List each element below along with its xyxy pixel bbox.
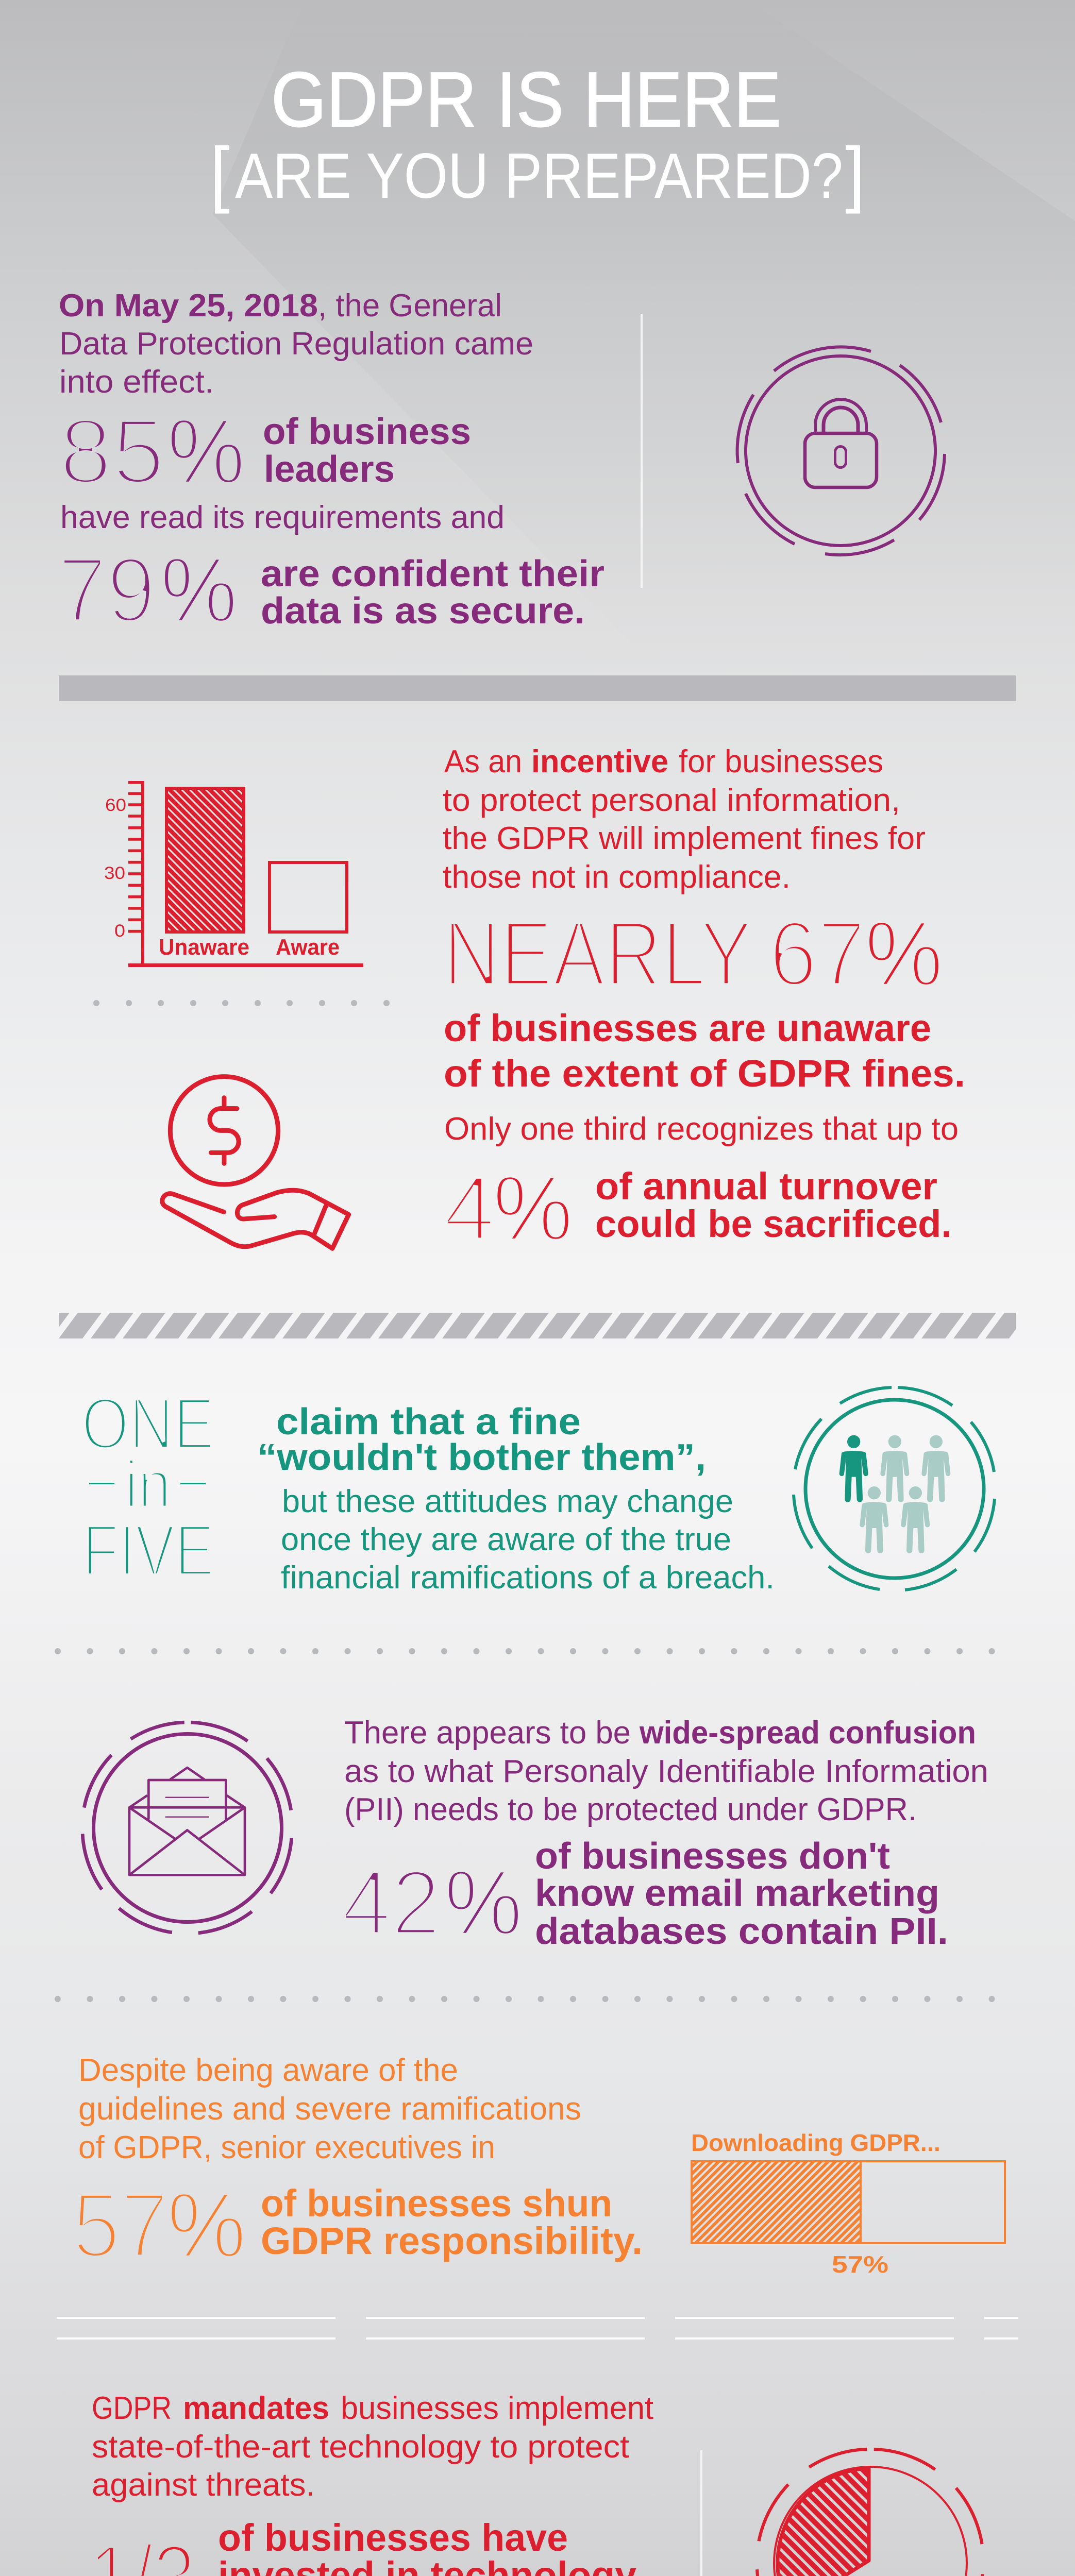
text: despite being aware: guidelines and severe ramifications [78,2091,581,2127]
stat: 85% [59,400,245,503]
stat: one in five: in [125,1447,171,1522]
stat label: of business leaders: of business [263,411,471,452]
text: attitudes may change [281,1484,775,1596]
stat: 42%: % [444,1851,523,1955]
divider: solid bar [59,675,1016,701]
stat label: shun responsibility: of businesses shun [261,2182,612,2225]
chart: download progress bar: 57% [832,2251,888,2278]
intro text: , the General [318,288,502,324]
text: despite being aware: of GDPR, senior executives in [78,2130,495,2165]
text: mandates: state-of-the-art technology to protect [92,2429,629,2465]
intro text: On May 25, 2018 [59,288,318,324]
text: mandates: mandates [183,2391,329,2426]
stat label: don't know: of businesses don't [535,1836,890,1877]
title: ] [845,132,865,214]
stat label: don't know [535,1836,948,1952]
text: incentive: to protect personal information, [443,783,900,818]
bar chart: unaware vs aware: 30 [104,863,125,883]
chart: pie one third [757,2449,983,2576]
text: incentive: incentive [531,744,668,779]
text: mandates: businesses implement [341,2391,653,2426]
stat label: are confident: are confident their [261,553,604,595]
text: wide-spread confusion [344,1715,988,1827]
text: incentive: the GDPR will implement fines for [443,821,926,856]
stat: 42%: 42 [342,1851,441,1955]
bar chart: unaware vs aware: Aware [276,935,340,960]
text: wide-spread confusion: (PII) needs to be protected under GDPR. [344,1792,917,1827]
title: GDPR IS HERE [271,56,781,143]
stat label: wouldn't bother them [257,1401,706,1478]
stat: one in five: FIVE [82,1510,214,1591]
text: have read its requirements: have read its requirements and [60,500,505,535]
title [210,56,865,214]
text: incentive [443,744,926,895]
stat: 4% [444,1157,573,1260]
stat label: are confident: data is as secure. [261,590,585,632]
bar chart: unaware vs aware: Unaware [159,935,249,960]
chart: download progress bar: Downloading GDPR... [691,2129,940,2156]
text: despite being aware [78,2053,581,2165]
text: one third: Only one third recognizes that up to [444,1111,959,1147]
stat: one in five: ONE [81,1383,214,1465]
stat label: shun responsibility: GDPR responsibility. [261,2219,643,2262]
bar chart: unaware vs aware: 60 [105,795,126,815]
dotted divider: row 2 [55,1648,995,1654]
stat: 4%: % [493,1157,573,1260]
stat label: shun responsibility [261,2182,643,2262]
panel: one in five [81,1383,995,1596]
text: attitudes may change: but these attitudes may change [282,1484,733,1519]
stat label: don't know: databases contain PII. [535,1911,948,1952]
stat: 79% [58,538,238,642]
text: despite being aware: Despite being aware of the [78,2053,458,2088]
intro text: into effect. [59,364,214,400]
icon: padlock in circle [737,347,945,555]
stat: 79%: 79 [58,538,156,642]
panel: shunning responsibility [72,2053,1005,2278]
stat label: invested in technology: of businesses have [218,2516,568,2559]
stat label: wouldn't bother them: “wouldn't bother them”, [257,1437,706,1478]
icon: hand holding coin [162,1077,349,1248]
stat: 42% [342,1851,523,1955]
text: wide-spread confusion: as to what Personaly Identifiable Information [344,1754,988,1789]
stat: nearly 67%: NEARLY [443,902,752,1006]
dotted divider: short [93,1000,390,1006]
divider: double white dashes [57,2317,1018,2340]
title: [ [210,132,230,214]
text: wide-spread confusion: There appears to be [344,1715,631,1751]
stat: 57% [72,2174,246,2277]
stat: 79%: % [160,538,238,642]
icon: five people in circle [794,1387,995,1590]
stat label: of business leaders [263,411,471,490]
stat: 57%: % [167,2174,246,2277]
stat label: invested in technology [218,2516,636,2576]
stat label: annual turnover: of annual turnover [595,1165,937,1208]
stat: nearly 67%: % [865,902,943,1006]
intro text [59,288,533,400]
text: attitudes may change: once they are aware of the true [281,1522,731,1557]
text: incentive: for businesses [679,744,883,779]
panel: GDPR into effect [58,288,604,642]
panel: technology mandate [89,2391,983,2576]
text: incentive: those not in compliance. [443,859,791,895]
stat: one in five [81,1383,214,1591]
text: mandates [92,2391,653,2503]
text: attitudes may change: financial ramifications of a breach. [281,1560,775,1596]
stat: 4%: 4 [444,1157,495,1260]
bar chart: unaware vs aware [104,781,363,967]
icon: open envelope in circle [82,1722,292,1933]
stat label: don't know: know email marketing [535,1873,939,1914]
panel: fines [93,744,965,1260]
stat label: wouldn't bother them: claim that a fine [276,1401,581,1443]
stat: 85%: 85 [59,400,165,503]
intro text: Data Protection Regulation came [59,326,533,362]
stat label: are confident [261,553,604,632]
text: wide-spread confusion: wide-spread confusion [639,1715,976,1751]
stat: nearly 67%: 67 [769,902,866,1006]
stat: 57%: 57 [72,2174,169,2277]
stat label: unaware of fines: of businesses are unaware [444,1007,931,1049]
stat label: unaware of fines: of the extent of GDPR fines. [444,1052,965,1095]
stat label: of business leaders: leaders [264,449,395,490]
text: incentive: As an [444,744,522,779]
title: ARE YOU PREPARED? [235,141,843,212]
panel: PII confusion [82,1715,988,1955]
divider: striped bar [59,1313,1016,1338]
text: mandates: against threats. [92,2467,315,2503]
text: mandates: GDPR [92,2391,172,2426]
stat label: annual turnover [595,1165,952,1245]
stat label: annual turnover: could be sacrificed. [595,1202,952,1245]
bar chart: unaware vs aware: 0 [114,921,125,941]
stat label: unaware of fines [444,1007,965,1095]
stat: 85%: % [167,400,245,503]
chart: download progress bar [691,2129,1005,2278]
dotted divider: row 3 [55,1996,995,2002]
